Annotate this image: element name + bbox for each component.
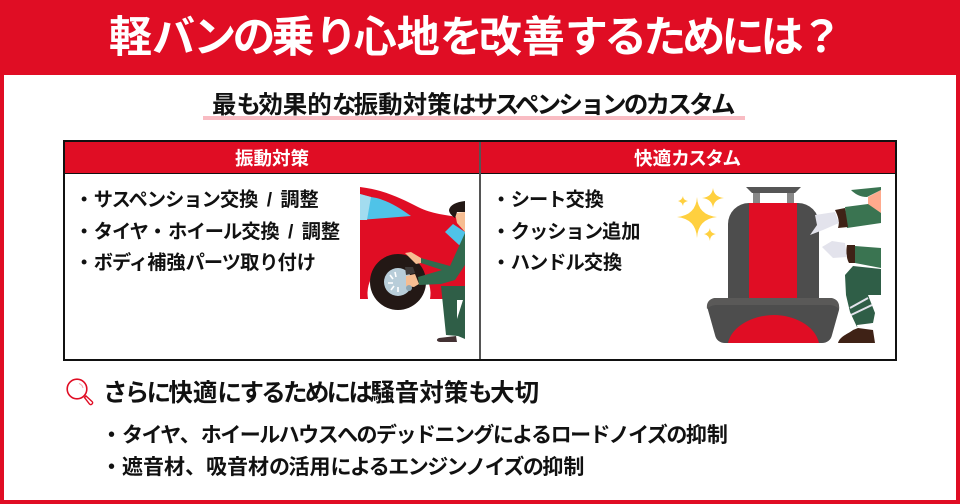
icon: sparkles <box>677 188 724 241</box>
list item 1: ・サスペンション交換 / 調整 <box>74 190 319 211</box>
illustration: car seat with sparkles and mechanic <box>677 187 881 343</box>
list: comfort customs <box>492 189 640 274</box>
list: vibration measures <box>74 189 340 274</box>
title: 軽バンの乗り心地を改善するためには？ <box>109 14 839 62</box>
comparison table <box>63 140 897 361</box>
list item 1: ・タイヤ、ホイールハウスへのデッドニングによるロードノイズの抑制 <box>101 424 728 447</box>
subtitle: 最も効果的な振動対策はサスペンションのカスタム <box>212 92 733 119</box>
seat <box>707 187 839 343</box>
column header: comfort: 快適カスタム <box>634 148 740 169</box>
table header background <box>65 142 895 174</box>
column header: vibration: 振動対策 <box>235 148 309 169</box>
subtitle underline <box>203 116 745 120</box>
section heading: noise: さらに快適にするためには騒音対策も大切 <box>103 380 539 407</box>
mechanic <box>810 187 881 343</box>
list: noise measures <box>101 424 728 479</box>
column divider <box>479 142 481 359</box>
list item 2: ・遮音材、吸音材の活用によるエンジンノイズの抑制 <box>101 456 584 479</box>
list item 3: ・ボディ補強パーツ取り付け <box>74 253 315 274</box>
list item 1: ・シート交換 <box>492 190 604 211</box>
illustration: mechanic changing car tyre <box>360 187 465 342</box>
list item 2: ・クッション追加 <box>492 222 640 243</box>
list item 2: ・タイヤ・ホイール交換 / 調整 <box>74 222 340 243</box>
icon: magnifying glass <box>66 378 94 406</box>
list item 3: ・ハンドル交換 <box>492 253 622 274</box>
